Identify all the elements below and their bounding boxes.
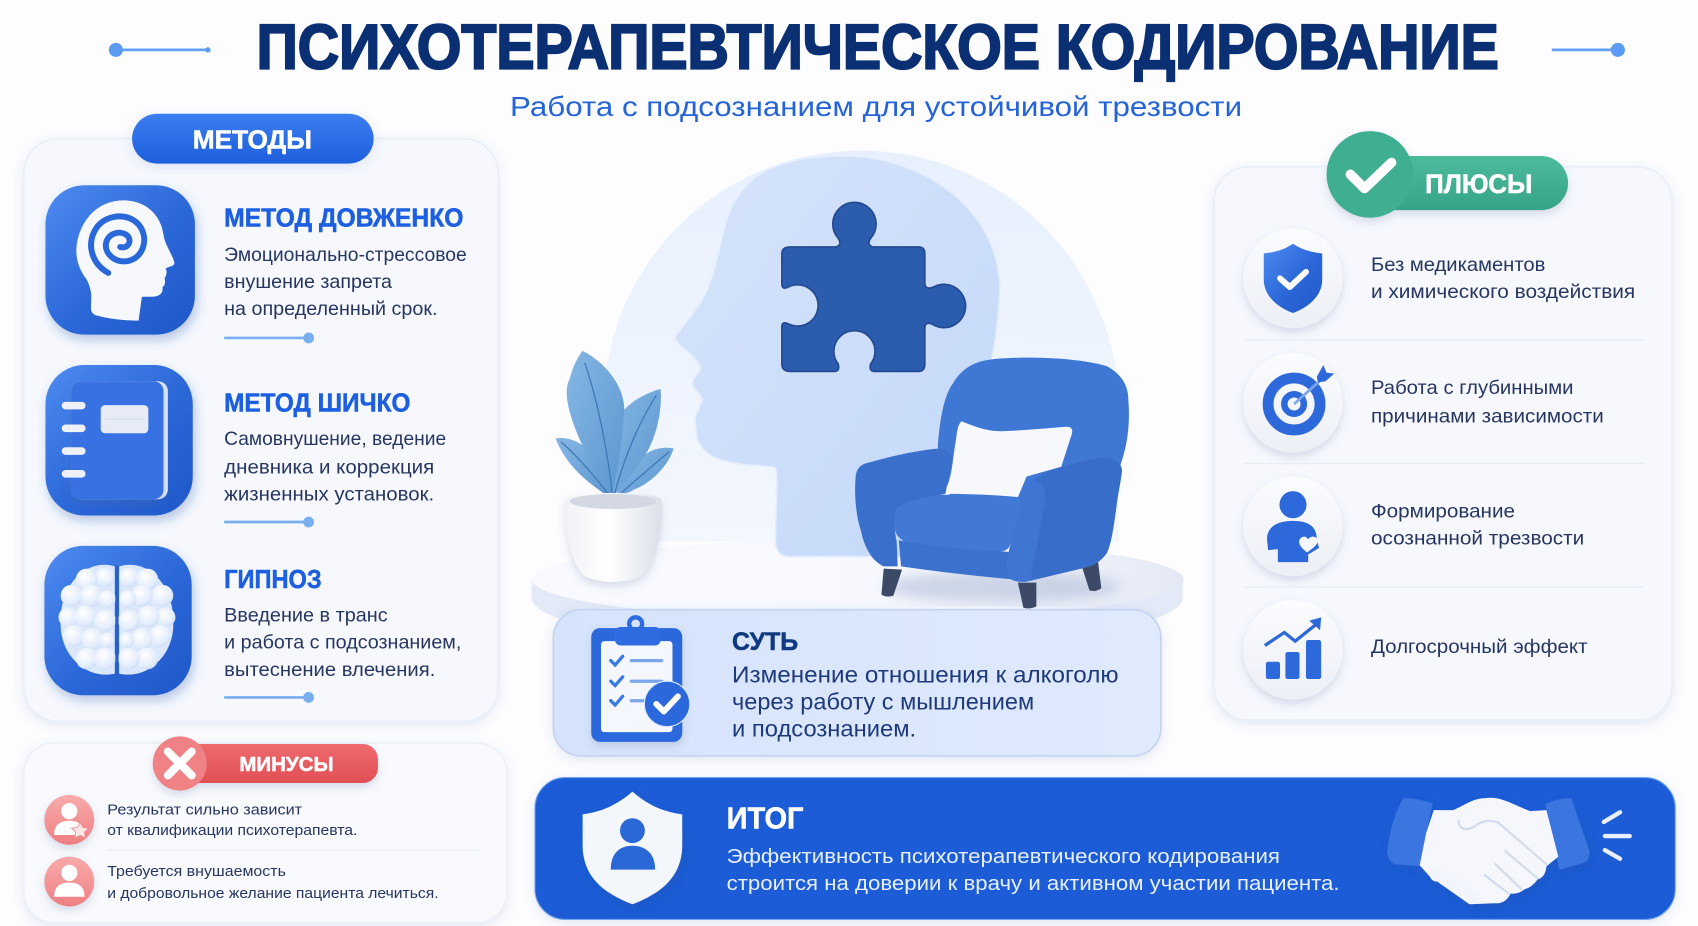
text: essence	[732, 661, 1119, 741]
subtitle: Работа с подсознанием для устойчивой трезвости	[510, 91, 1242, 122]
text: Dovzhenko method: внушение запрета	[224, 271, 392, 293]
text: no medication: и химического воздействия	[1371, 281, 1635, 303]
title accent left	[109, 43, 211, 57]
flower pot	[565, 493, 662, 582]
heading: result: ИТОГ	[727, 802, 804, 835]
text: long-term effect: Долгосрочный эффект	[1371, 636, 1588, 658]
pillow	[946, 421, 1072, 497]
text: deep causes: причинами зависимости	[1371, 405, 1604, 427]
text: essence: и подсознанием.	[732, 715, 916, 741]
text: minus one	[107, 801, 357, 839]
text: Shichko method: дневника и коррекция	[224, 456, 434, 478]
text: hypnosis: вытеснение влечения.	[224, 659, 435, 681]
left arm	[855, 448, 952, 566]
title accent right	[1552, 43, 1625, 57]
text: Shichko method	[224, 428, 446, 505]
icon: notebook	[45, 365, 193, 516]
icon: target	[1243, 353, 1343, 453]
heading: Shichko method: МЕТОД ШИЧКО	[224, 388, 410, 418]
text: hypnosis: Введение в транс	[224, 605, 388, 627]
panel: pluses	[1214, 131, 1672, 720]
right arm	[1007, 458, 1122, 582]
icon: clipboard	[591, 617, 690, 742]
text: minus two: и добровольное желание пациента лечиться.	[107, 885, 439, 902]
text: Shichko method: жизненных установок.	[224, 483, 434, 505]
text: hypnosis: и работа с подсознанием,	[224, 632, 461, 654]
icon: handshake	[1387, 798, 1590, 904]
text: Dovzhenko method	[224, 244, 467, 320]
text: conscious sobriety: Формирование	[1371, 501, 1515, 523]
panel: result	[535, 778, 1675, 919]
text: deep causes	[1371, 377, 1604, 427]
icon: shield check	[1243, 229, 1343, 328]
head silhouette	[675, 156, 1000, 557]
icon: shield with person	[583, 792, 682, 904]
seat cushion	[894, 495, 1021, 551]
icon: brain	[44, 546, 192, 695]
panel: essence	[553, 610, 1161, 756]
icon: person with heart	[1243, 477, 1343, 576]
badge: minuses	[153, 736, 378, 791]
text: minus two: Требуется внушаемость	[107, 863, 286, 880]
text: result: Эффективность психотерапевтического кодирования	[727, 845, 1280, 868]
armchair	[855, 358, 1129, 608]
text: result: строится на доверии к врачу и активном участии пациента.	[727, 872, 1340, 895]
text: no medication	[1371, 254, 1635, 303]
icon: person	[44, 857, 94, 906]
puzzle piece	[782, 202, 966, 371]
platform	[532, 539, 1184, 650]
text: conscious sobriety	[1371, 501, 1584, 550]
text: essence: Изменение отношения к алкоголю	[732, 661, 1119, 687]
badge: pluses	[1327, 131, 1568, 218]
central illustration	[532, 151, 1184, 650]
text: Dovzhenko method: Эмоционально-стрессовое	[224, 244, 467, 266]
icon: specialist with star	[44, 795, 94, 845]
chair base	[899, 540, 1013, 579]
icon: head with spiral	[45, 185, 195, 335]
chair back	[938, 358, 1129, 542]
text: minus two	[107, 863, 439, 902]
plant	[556, 351, 674, 582]
badge: methods	[132, 114, 374, 164]
text: conscious sobriety: осознанной трезвости	[1371, 528, 1584, 550]
badge: minuses: МИНУСЫ	[239, 753, 334, 776]
badge: pluses: ПЛЮСЫ	[1425, 168, 1532, 199]
heading: hypnosis: ГИПНОЗ	[224, 564, 322, 594]
text: essence: через работу с мышлением	[732, 688, 1034, 714]
text: no medication: Без медикаментов	[1371, 254, 1545, 276]
text: Dovzhenko method: на определенный срок.	[224, 298, 437, 320]
text: hypnosis	[224, 605, 461, 681]
text: minus one: от квалификации психотерапевта.	[107, 822, 357, 839]
icon: growth chart	[1243, 600, 1343, 700]
text: Shichko method: Самовнушение, ведение	[224, 428, 446, 450]
heading: essence: СУТЬ	[732, 628, 798, 656]
text: result	[727, 845, 1340, 895]
badge: methods: МЕТОДЫ	[193, 124, 312, 154]
icon: rays	[1604, 812, 1630, 859]
panel: minuses	[24, 736, 507, 923]
heading: Dovzhenko method: МЕТОД ДОВЖЕНКО	[224, 202, 463, 232]
text: minus one: Результат сильно зависит	[107, 801, 302, 818]
panel: methods	[24, 114, 498, 721]
text: deep causes: Работа с глубинными	[1371, 377, 1573, 399]
title: ПСИХОТЕРАПЕВТИЧЕСКОЕ КОДИРОВАНИЕ	[257, 12, 1499, 82]
